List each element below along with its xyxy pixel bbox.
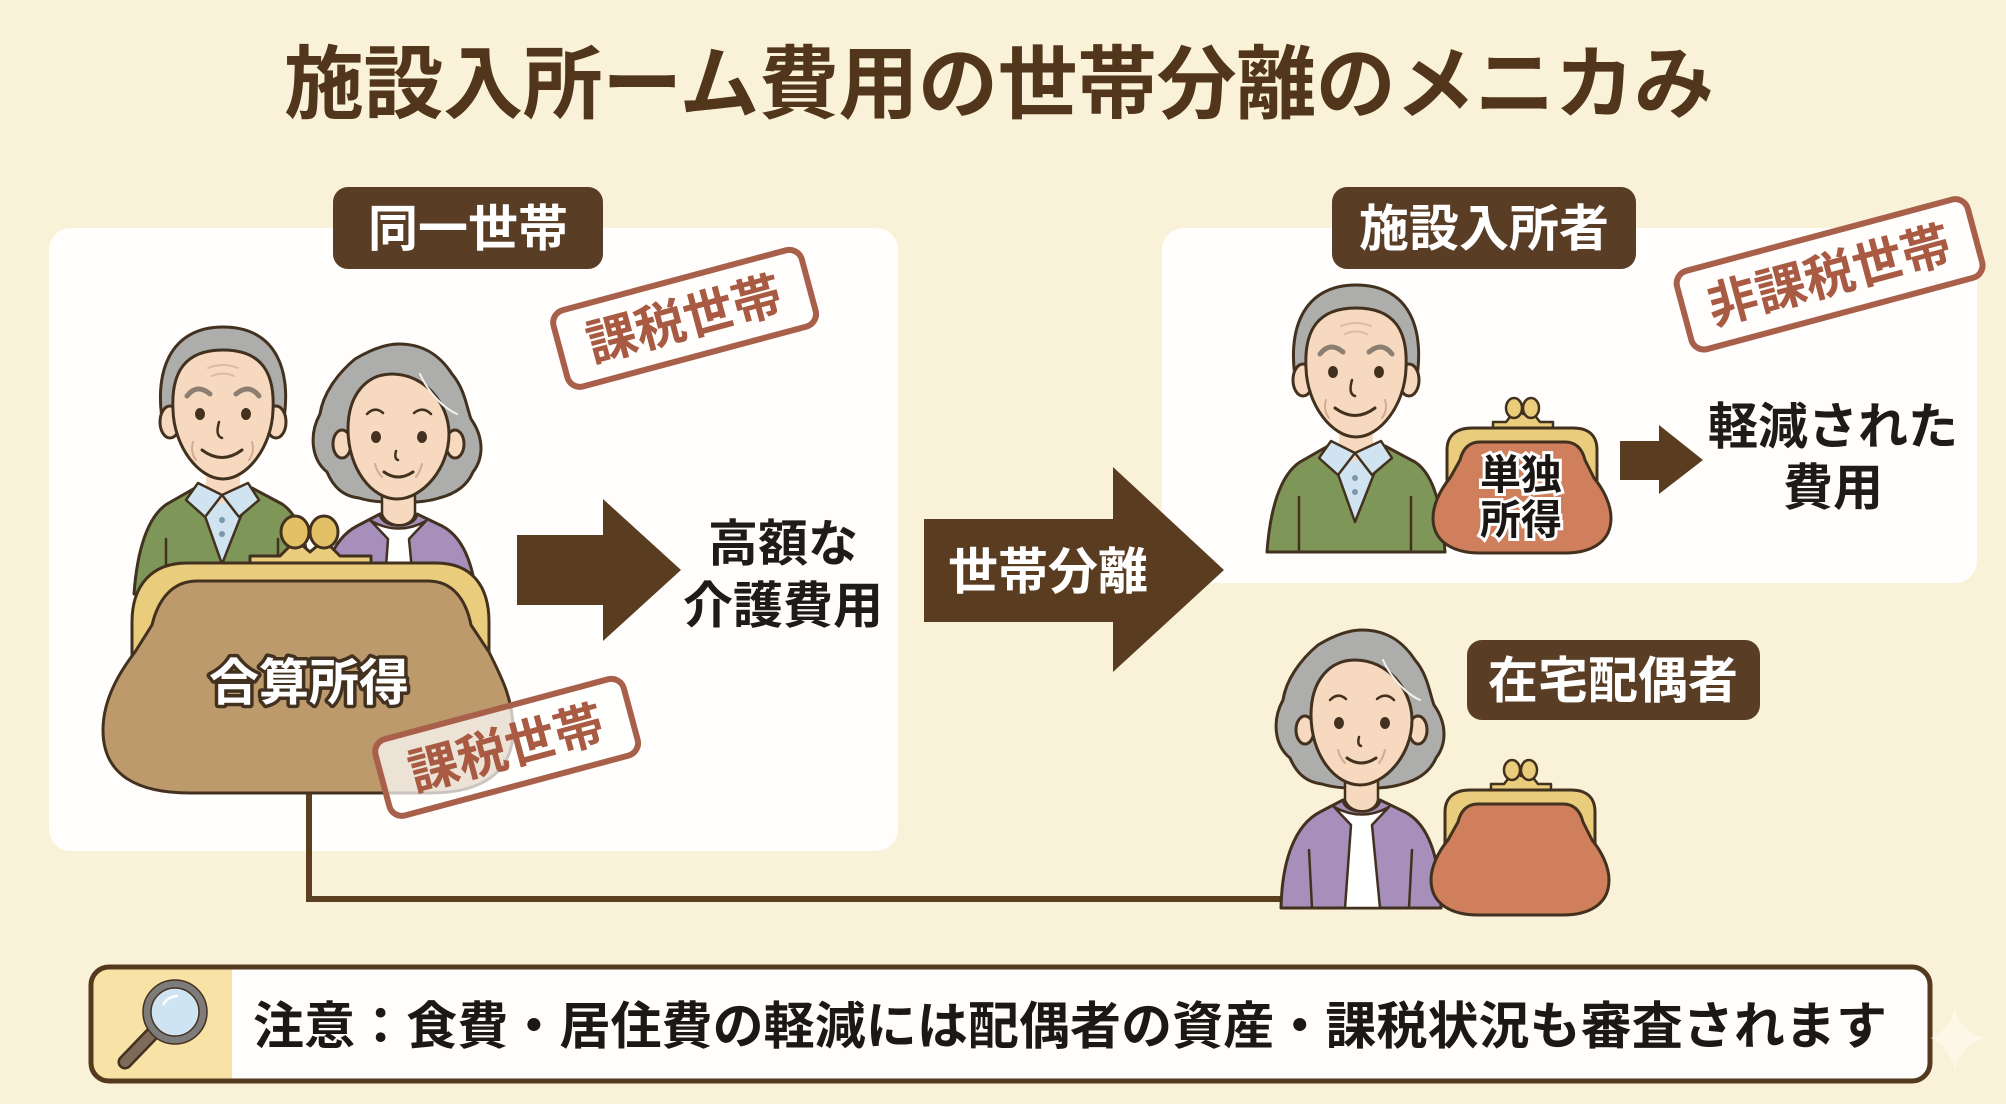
text: high care cost: 高額な <box>708 516 858 572</box>
text: reduced cost: 費用 <box>1783 460 1883 516</box>
text: note: 注意：食費・居住費の軽減には配偶者の資産・課税状況も審査されます <box>253 998 1887 1055</box>
couple illustration <box>134 327 481 622</box>
connector line <box>309 780 1285 899</box>
icon: spouse purse <box>1431 760 1609 915</box>
text: high care cost <box>683 516 883 634</box>
label: single income <box>1480 452 1562 543</box>
heading: facility resident: 施設入所者 <box>1359 201 1609 257</box>
heading: same household <box>333 187 603 269</box>
icon: magnifying glass <box>125 980 207 1062</box>
text: reduced cost: 軽減された <box>1708 399 1958 455</box>
panel: same household <box>49 228 898 851</box>
label: single income: 単独 <box>1480 452 1562 498</box>
heading: same household: 同一世帯 <box>368 201 568 257</box>
label: single income: 所得 <box>1480 497 1562 543</box>
label: combined income: 合算所得 <box>209 655 409 711</box>
icon: elderly woman <box>313 344 481 622</box>
stamp: taxable household lower: 課税世帯 <box>403 696 610 802</box>
stamp: taxable household lower <box>372 676 641 819</box>
stamp: taxable household upper <box>550 247 819 390</box>
title: 施設入所ーム費用の世帯分離のメニカみ <box>284 40 1714 129</box>
heading: spouse at home: 在宅配偶者 <box>1488 653 1738 709</box>
icon: resident man <box>1267 285 1445 552</box>
heading: facility resident <box>1332 187 1636 269</box>
arrow: to high cost <box>517 499 681 641</box>
stamp: non-taxable household <box>1674 196 1985 352</box>
panel: facility resident <box>1162 228 1977 583</box>
single income purse <box>1433 398 1611 553</box>
text: high care cost: 介護費用 <box>683 578 883 634</box>
text: reduced cost <box>1708 399 1958 516</box>
arrow: household separation <box>924 467 1224 672</box>
arrow: household separation: 世帯分離 <box>948 544 1148 600</box>
arrow: to reduced cost <box>1620 425 1703 494</box>
stamp: non-taxable household: 非課税世帯 <box>1702 217 1958 335</box>
stamp: taxable household upper: 課税世帯 <box>581 267 788 373</box>
icon: sparkle <box>1930 1008 1985 1070</box>
heading: spouse at home <box>1467 640 1760 720</box>
icon: spouse woman <box>1276 630 1444 908</box>
combined purse <box>103 516 513 793</box>
note bar <box>91 967 1930 1081</box>
icon: elderly man <box>134 327 312 594</box>
